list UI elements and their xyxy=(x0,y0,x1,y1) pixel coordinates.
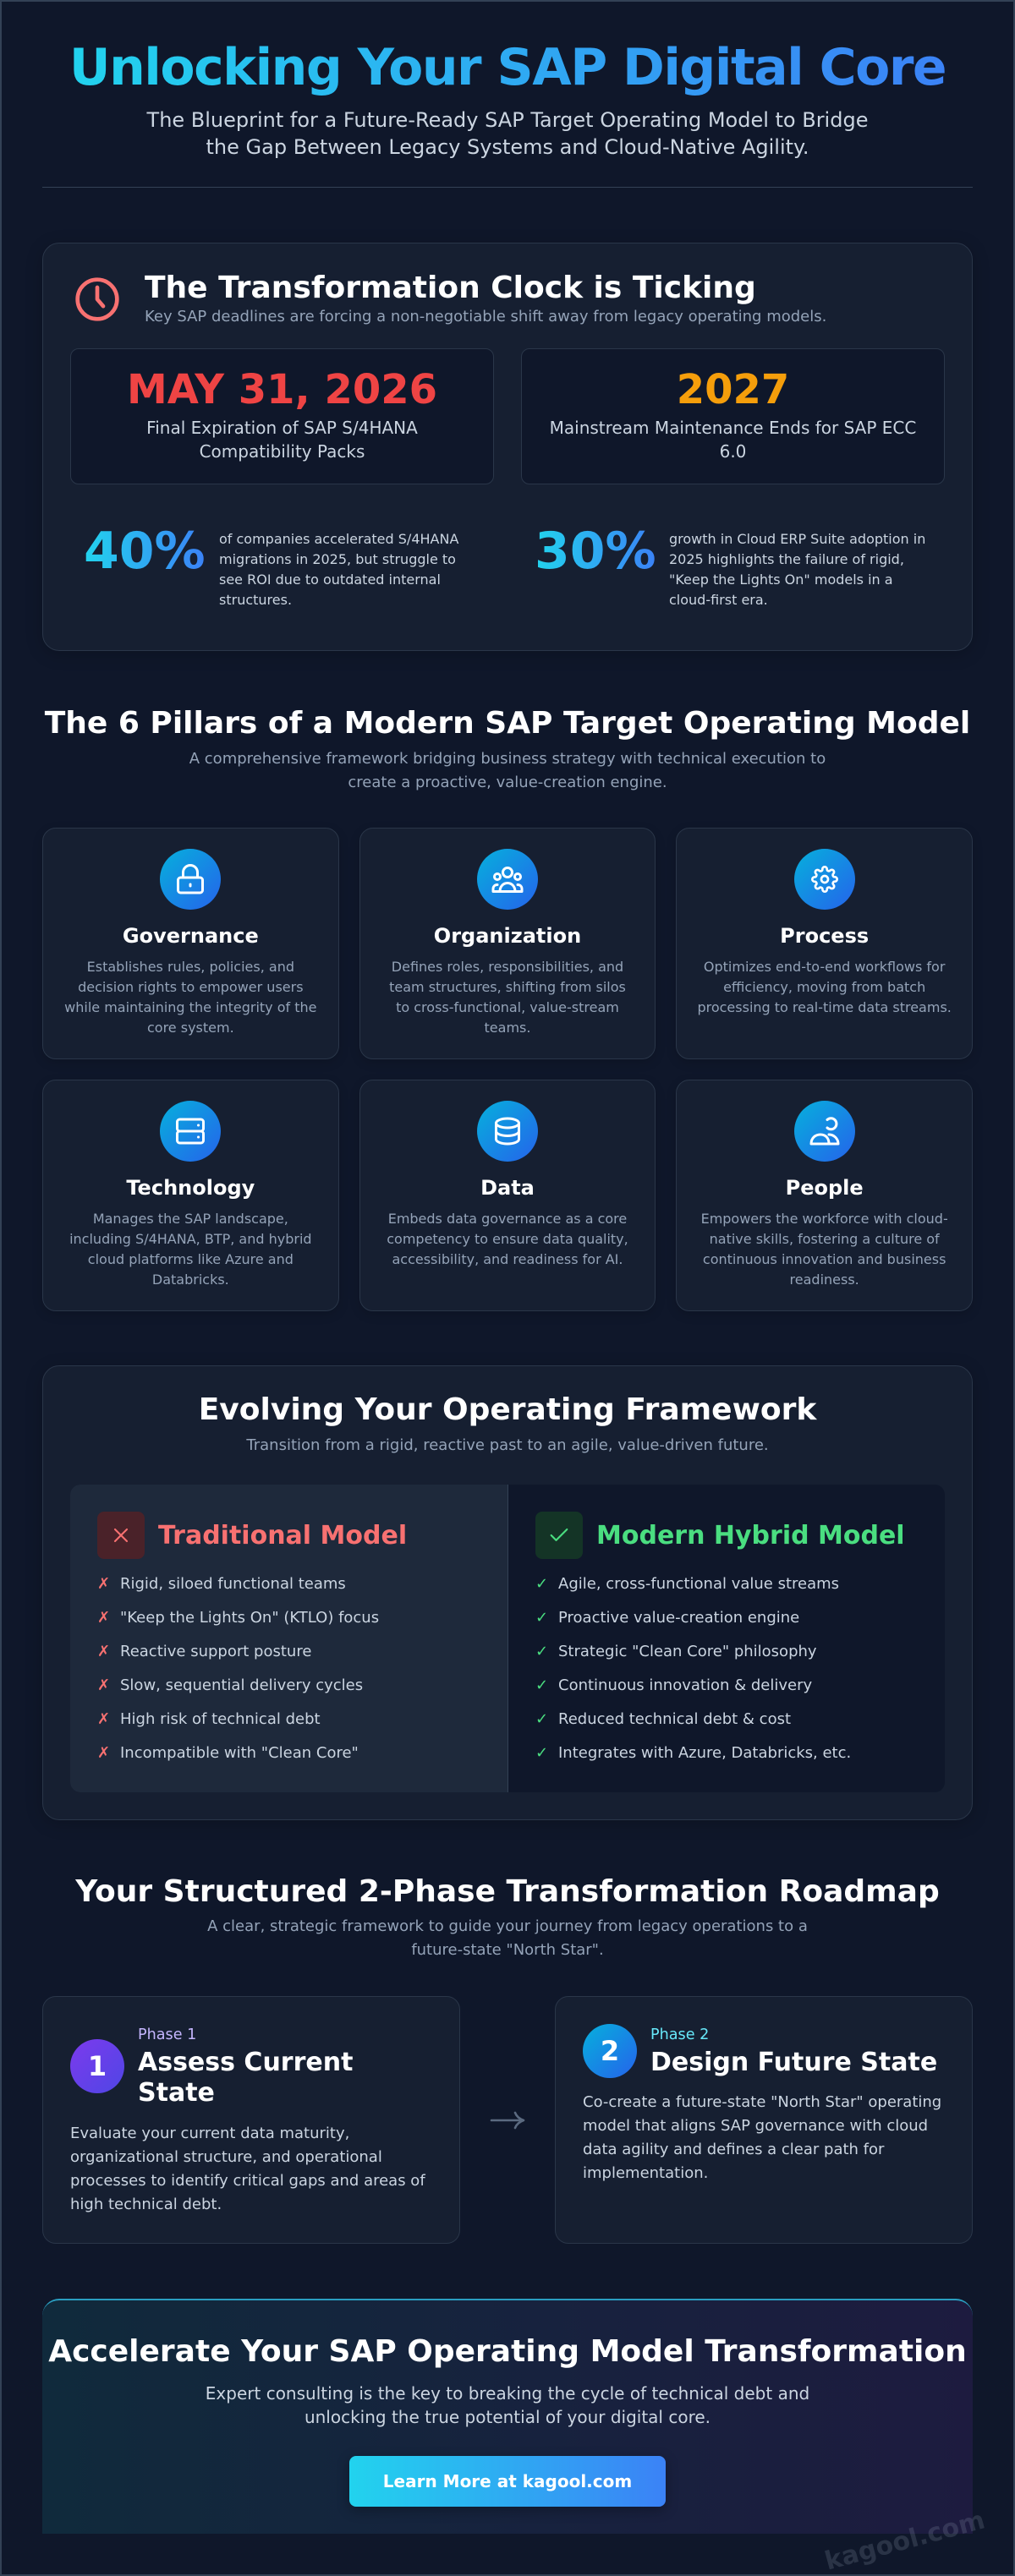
pillar card: people xyxy=(676,1080,973,1311)
list: modern traits: Reduced technical debt & cost xyxy=(558,1710,791,1728)
list: modern traits: Strategic "Clean Core" philosophy xyxy=(558,1643,817,1660)
pillar description: decision rights to empower users xyxy=(78,979,304,994)
watermark: kagool.com xyxy=(822,2505,988,2576)
pillar card: data xyxy=(359,1080,656,1311)
call to action panel xyxy=(42,2299,973,2534)
list: modern traits: ✓ xyxy=(535,1676,548,1694)
phase title: Assess Current xyxy=(138,2048,353,2077)
pillar card: process xyxy=(676,828,973,1059)
list: modern traits: ✓ xyxy=(535,1643,548,1660)
pillar description xyxy=(701,1211,948,1287)
phase title: Design Future State xyxy=(650,2048,937,2077)
pillar name: Technology xyxy=(126,1176,255,1200)
phase description: implementation. xyxy=(583,2164,708,2182)
column heading: Modern Hybrid Model xyxy=(596,1521,905,1551)
pillar description: Defines roles, responsibilities, and xyxy=(392,959,623,974)
pillar description: core system. xyxy=(147,1020,234,1035)
phase description xyxy=(583,2093,941,2182)
column: traditional model xyxy=(70,1485,508,1792)
phase description: Evaluate your current data maturity, xyxy=(70,2125,349,2142)
phase number badge xyxy=(583,2024,637,2078)
pillar description xyxy=(389,959,626,1035)
deadline label: Compatibility Packs xyxy=(200,441,365,462)
deadline card: May 31, 2026 xyxy=(70,348,494,484)
panel heading: Evolving Your Operating Framework xyxy=(199,1392,816,1427)
pillar description: teams. xyxy=(485,1020,530,1035)
pillar description: competency to ensure data quality, xyxy=(387,1231,628,1246)
stat text: migrations in 2025, but struggle to xyxy=(219,551,456,566)
pillar card: organization xyxy=(359,828,656,1059)
pillar description: Establishes rules, policies, and xyxy=(87,959,294,974)
list: traditional traits: High risk of technical debt xyxy=(120,1710,321,1728)
panel heading: The Transformation Clock is Ticking xyxy=(145,271,756,305)
list: traditional traits: "Keep the Lights On" (KTLO) focus xyxy=(120,1609,379,1627)
cta heading: Accelerate Your SAP Operating Model Transformation xyxy=(48,2334,967,2369)
phase label: Phase 2 xyxy=(650,2026,709,2043)
subtitle xyxy=(146,108,868,159)
pillar description: team structures, shifting from silos xyxy=(389,979,626,994)
stat text: see ROI due to outdated internal xyxy=(219,572,441,587)
pillar description: Embeds data governance as a core xyxy=(388,1211,627,1226)
pillar name: Process xyxy=(780,924,869,948)
icon: check xyxy=(535,1512,583,1559)
stat text xyxy=(219,531,458,607)
panel subheading: Key SAP deadlines are forcing a non-negotiable shift away from legacy operating models. xyxy=(145,308,826,325)
deadline date: 2027 xyxy=(677,366,789,413)
phase label: Phase 1 xyxy=(138,2026,196,2043)
phase title: State xyxy=(138,2078,215,2108)
phase description xyxy=(70,2125,426,2213)
icon: person xyxy=(794,1101,855,1162)
pillar description: native skills, fostering a culture of xyxy=(710,1231,940,1246)
pillar description xyxy=(697,959,952,1015)
list: modern traits: Agile, cross-functional value streams xyxy=(558,1575,839,1593)
comparison table xyxy=(70,1485,945,1792)
list: traditional traits: ✗ xyxy=(97,1710,110,1728)
list: modern traits: ✓ xyxy=(535,1710,548,1728)
list: traditional traits: ✗ xyxy=(97,1744,110,1762)
stat text xyxy=(669,531,925,607)
pillar description: Manages the SAP landscape, xyxy=(93,1211,288,1226)
stat text: 2025 highlights the failure of rigid, xyxy=(669,551,904,566)
deadline label: Final Expiration of SAP S/4HANA xyxy=(146,418,418,438)
deadline label: Mainstream Maintenance Ends for SAP ECC xyxy=(550,418,916,438)
cta button: Learn More at kagool.com xyxy=(383,2471,632,2491)
pillar name: Organization xyxy=(434,924,581,948)
list: modern traits: ✓ xyxy=(535,1609,548,1627)
pillar name: People xyxy=(786,1176,864,1200)
list: traditional traits: Reactive support posture xyxy=(120,1643,311,1660)
panel: operating framework comparison xyxy=(42,1365,973,1820)
list: traditional traits: ✗ xyxy=(97,1575,110,1593)
pillar description: Optimizes end-to-end workflows for xyxy=(704,959,945,974)
deadline date: MAY 31, 2026 xyxy=(127,366,437,413)
list: traditional traits: ✗ xyxy=(97,1643,110,1660)
section subheading: roadmap xyxy=(207,1917,808,1959)
list: traditional traits: Slow, sequential delivery cycles xyxy=(120,1676,363,1694)
list: traditional traits xyxy=(97,1575,379,1762)
pillar description: readiness. xyxy=(790,1272,859,1287)
list: traditional traits: Rigid, siloed functional teams xyxy=(120,1575,346,1593)
stat text: cloud-first era. xyxy=(669,592,768,607)
list: modern traits: Proactive value-creation engine xyxy=(558,1609,799,1627)
subtitle: The Blueprint for a Future-Ready SAP Target Operating Model to Bridge xyxy=(147,108,868,132)
icon: lock xyxy=(160,849,221,910)
phase description: data agility and defines a clear path for xyxy=(583,2141,884,2158)
deadline label xyxy=(550,418,916,462)
pillar description: Empowers the workforce with cloud- xyxy=(701,1211,948,1226)
icon: server xyxy=(160,1101,221,1162)
phase description: organizational structure, and operational xyxy=(70,2148,382,2166)
stat text: "Keep the Lights On" models in a xyxy=(669,572,893,587)
pillar description xyxy=(69,1211,312,1287)
section heading: roadmap: Your Structured 2-Phase Transformation Roadmap xyxy=(75,1873,940,1909)
phase description: model that aligns SAP governance with cloud xyxy=(583,2117,928,2135)
cta button xyxy=(349,2456,666,2507)
column heading: Traditional Model xyxy=(158,1521,407,1551)
pillar description: continuous innovation and business xyxy=(703,1251,946,1266)
cta text: Expert consulting is the key to breaking the cycle of technical debt and xyxy=(206,2383,809,2404)
deadline label xyxy=(146,418,418,462)
list: traditional traits: ✗ xyxy=(97,1609,110,1627)
icon: team xyxy=(477,849,538,910)
list: modern traits: ✓ xyxy=(535,1575,548,1593)
pillar description: while maintaining the integrity of the xyxy=(64,999,316,1015)
deadline label: 6.0 xyxy=(720,441,746,462)
list: modern traits: Continuous innovation & delivery xyxy=(558,1676,812,1694)
section subheading: pillars xyxy=(189,750,826,791)
phase number badge xyxy=(70,2039,124,2093)
phase title xyxy=(138,2048,353,2108)
stat: 40% xyxy=(84,522,458,607)
icon: database xyxy=(477,1101,538,1162)
phase number badge: 1 xyxy=(88,2050,107,2082)
stat: 30% xyxy=(535,522,925,607)
pillar description: Databricks. xyxy=(152,1272,229,1287)
section heading: pillars: The 6 Pillars of a Modern SAP Target Operating Model xyxy=(45,705,970,741)
title: Unlocking Your SAP Digital Core xyxy=(69,38,946,97)
column: modern hybrid model xyxy=(535,1512,905,1762)
pillar description: efficiency, moving from batch xyxy=(723,979,925,994)
list: modern traits: Integrates with Azure, Databricks, etc. xyxy=(558,1744,851,1762)
arrow between phases xyxy=(491,2112,524,2129)
list: traditional traits: Incompatible with "Clean Core" xyxy=(120,1744,359,1762)
section subheading: roadmap: A clear, strategic framework to guide your journey from legacy operations to a xyxy=(207,1917,808,1935)
list: traditional traits: ✗ xyxy=(97,1676,110,1694)
section subheading: pillars: create a proactive, value-creation engine. xyxy=(348,774,667,791)
stat text: structures. xyxy=(219,592,292,607)
pillar description: cloud platforms like Azure and xyxy=(88,1251,294,1266)
stat text: growth in Cloud ERP Suite adoption in xyxy=(669,531,925,546)
cta text: unlocking the true potential of your digital core. xyxy=(304,2407,710,2427)
pillar description: processing to real-time data streams. xyxy=(697,999,952,1015)
list: modern traits: ✓ xyxy=(535,1744,548,1762)
stat text: of companies accelerated S/4HANA xyxy=(219,531,458,546)
icon: clock xyxy=(75,277,119,321)
pillar description xyxy=(387,1211,628,1266)
stat value: 40% xyxy=(84,522,206,581)
icon: gear xyxy=(794,849,855,910)
pillar name: Data xyxy=(480,1176,535,1200)
list: modern traits xyxy=(535,1575,851,1762)
section subheading: roadmap: future-state "North Star". xyxy=(411,1941,604,1959)
phase description: Co-create a future-state "North Star" operating xyxy=(583,2093,941,2111)
phase number badge: 2 xyxy=(601,2035,619,2067)
pillar description: accessibility, and readiness for AI. xyxy=(392,1251,623,1266)
phase card 2 xyxy=(555,1996,973,2244)
pillar description xyxy=(64,959,316,1035)
section subheading: pillars: A comprehensive framework bridging business strategy with technical execution to xyxy=(189,750,826,768)
cta text xyxy=(206,2383,809,2427)
pillar description: including S/4HANA, BTP, and hybrid xyxy=(69,1231,312,1246)
header divider xyxy=(42,187,973,188)
stat value: 30% xyxy=(535,522,656,581)
pillar description: to cross-functional, value-stream xyxy=(396,999,619,1015)
phase card 1 xyxy=(42,1996,460,2244)
subtitle: the Gap Between Legacy Systems and Cloud-Native Agility. xyxy=(206,135,809,159)
icon: cross xyxy=(97,1512,145,1559)
pillar card: technology xyxy=(42,1080,339,1311)
phase description: high technical debt. xyxy=(70,2196,222,2213)
pillar card: governance xyxy=(42,828,339,1059)
phase description: processes to identify critical gaps and areas of xyxy=(70,2172,425,2190)
panel subheading: Transition from a rigid, reactive past to an agile, value-driven future. xyxy=(246,1436,769,1454)
pillar name: Governance xyxy=(123,924,259,948)
deadline card: 2027 xyxy=(521,348,945,484)
panel: transformation clock xyxy=(42,243,973,651)
